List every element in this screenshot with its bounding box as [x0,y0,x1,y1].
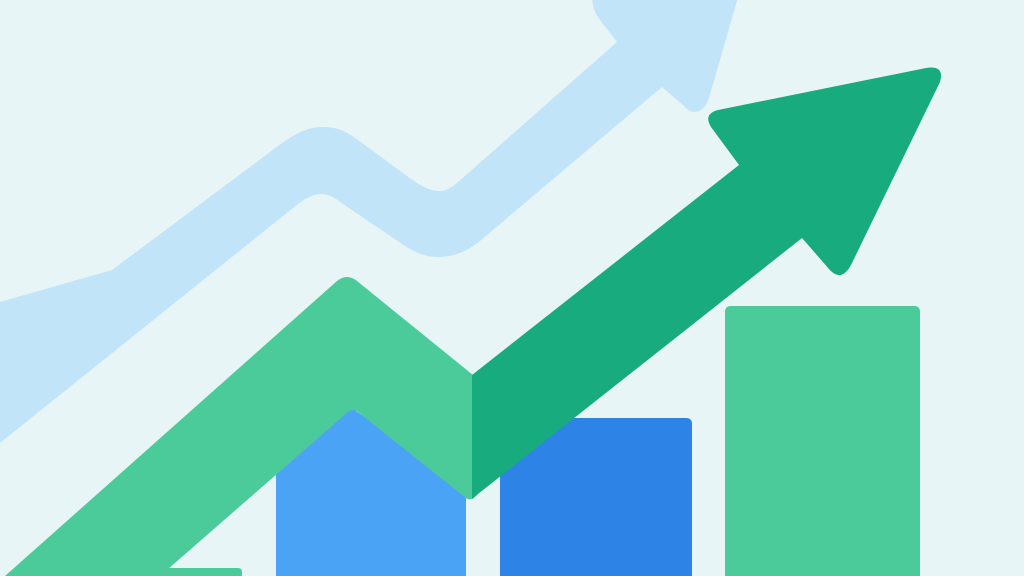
arrow: light blue background trend [0,0,739,443]
arrow: green trend line body [5,277,473,576]
bar: small green [150,568,242,576]
bar: dark blue [500,418,692,576]
bar: light blue [276,408,466,576]
arrow: dark green rising head [472,68,941,499]
bar: tall green [725,306,920,576]
